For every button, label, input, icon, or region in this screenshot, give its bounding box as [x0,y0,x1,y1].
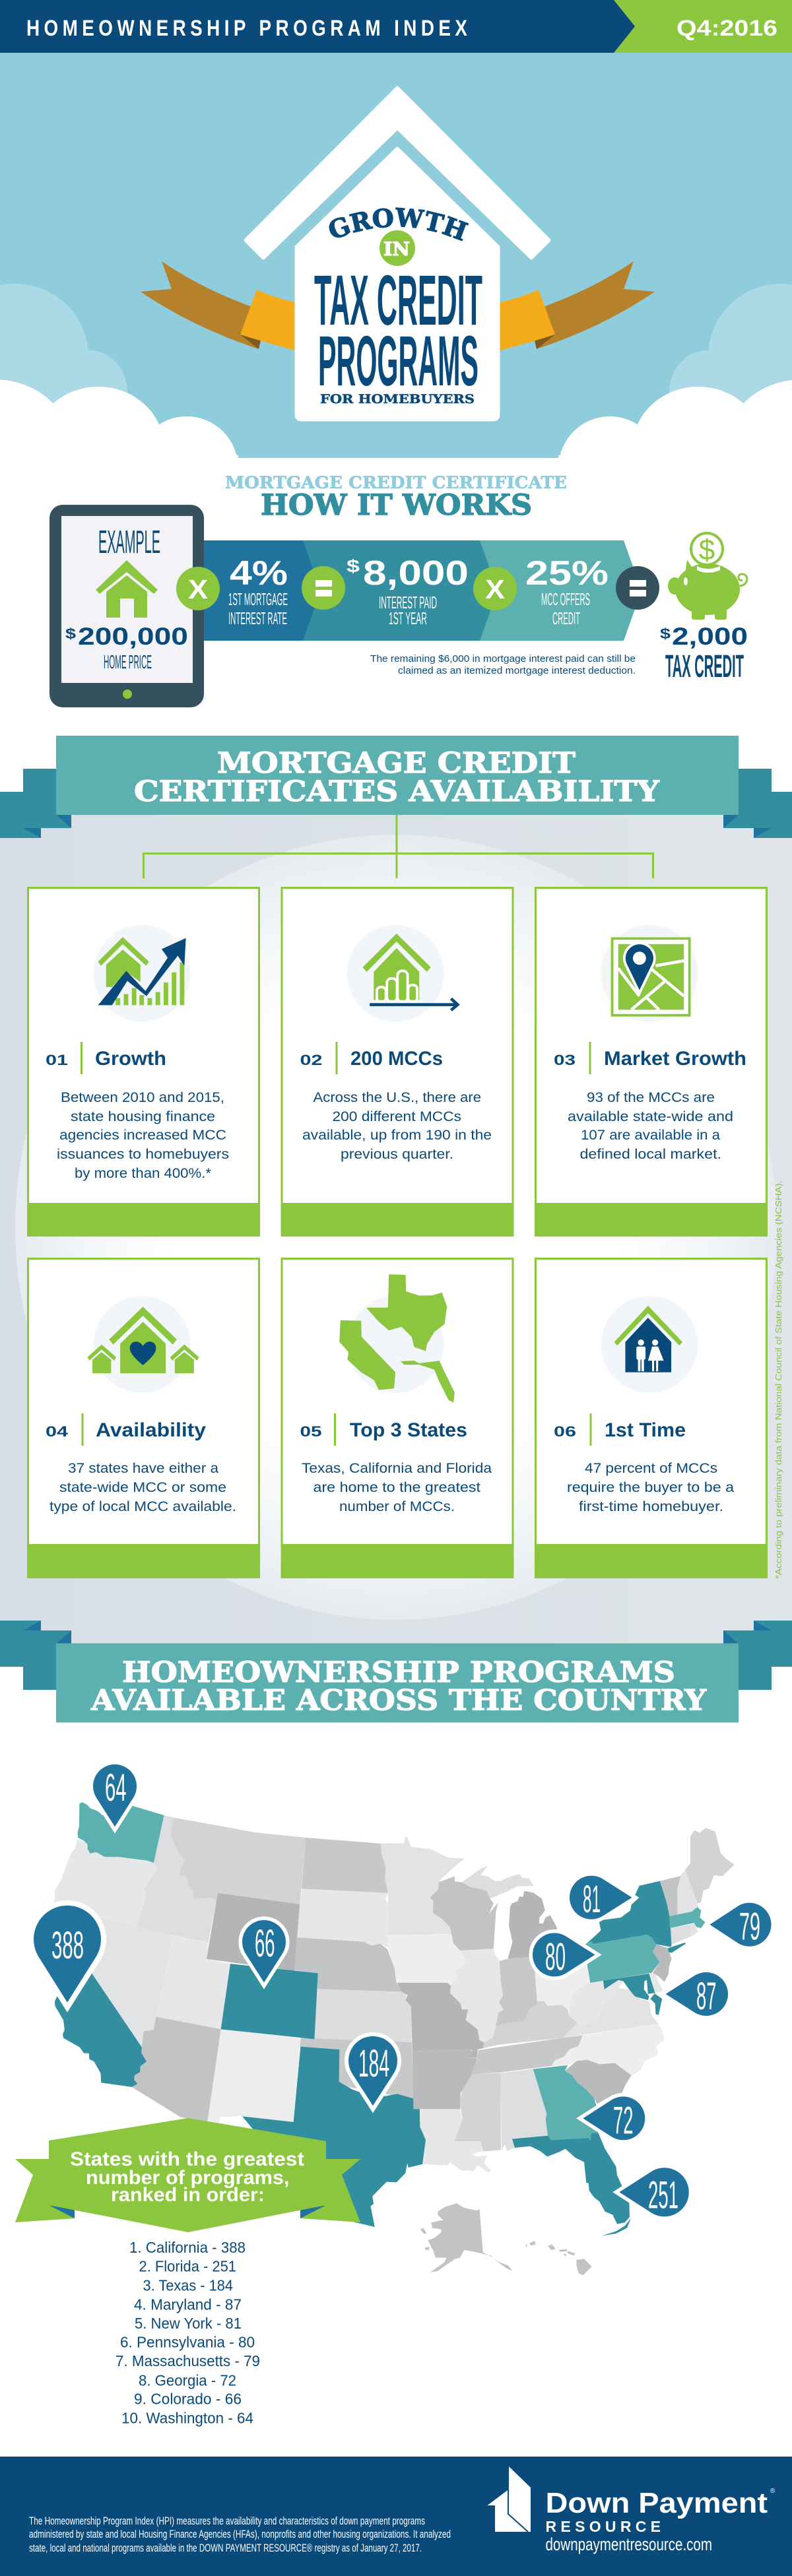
label: 25 percent: CREDIT [552,608,580,628]
card heading: Growth [95,1048,166,1070]
ranked state list: 1. California - 388 [129,2239,246,2256]
state: Hawaii [526,2241,592,2275]
icon: piggy bank: $ [699,534,715,566]
icon: house with bars and arrow [347,925,457,1022]
card 3: market growth [535,888,768,1236]
note text: claimed as an itemized mortgage interest deduction. [398,665,636,676]
label: 8000 [346,554,469,628]
logo wordmark: ® [770,2488,776,2495]
state: Alaska [420,2203,513,2272]
card number: 01 [46,1052,68,1068]
card text [568,1090,733,1162]
card text: state-wide MCC or some [59,1480,226,1495]
card text: require the buyer to be a [567,1480,734,1495]
ribbon text: States with the greatest [70,2148,304,2170]
tablet with example: HOME PRICE [104,652,152,673]
card text: Between 2010 and 2015, [61,1090,224,1105]
map pin: Texas 184: 184 [358,2042,389,2085]
logo wordmark [545,2487,776,2554]
label: 8000: INTEREST PAID [379,593,437,612]
card text: state housing finance [71,1109,215,1124]
equation band: 1ST MORTGAGE [228,589,288,609]
map pin: Florida 251: 251 [648,2174,678,2217]
card divider [589,1042,591,1074]
footer text: administered by state and local Housing Finance Agencies (HFAs), nonprofits and other housing organizations. It analyzed [29,2528,451,2540]
card text: by more than 400%.* [75,1166,211,1181]
availability section background [0,792,792,1650]
map south states [420,2060,632,2173]
banner: programs heading: AVAILABLE ACROSS THE COUNTRY [90,1684,707,1717]
card text [567,1461,734,1514]
clouds: front right [558,379,792,521]
map pin: Maryland 87: 87 [696,1975,717,2018]
green ranking ribbon [15,2118,360,2232]
card text: 47 percent of MCCs [585,1461,717,1476]
title: in badge: IN [383,238,410,260]
how it works heading: HOW IT WORKS [261,489,532,522]
banner: availability heading: CERTIFICATES AVAILABILITY [134,775,660,808]
card divider [82,1413,83,1446]
ranked state list [116,2239,260,2427]
map pin: Pennsylvania 80 [533,1933,595,1978]
tablet price: 200,000 [78,623,188,650]
icon: house with couple [601,1296,698,1393]
result: tax credit: 2,000 [672,623,748,650]
card heading: 200 MCCs [350,1048,443,1070]
card text: Across the U.S., there are [313,1090,481,1105]
ribbon: right [500,261,655,350]
label: 8000: $ [346,556,360,576]
icon: growth house with arrow [94,925,191,1022]
logo wordmark: RESOURCE [545,2518,661,2535]
label: 4 percent [228,554,288,628]
map pin: Massachusetts 79: 79 [739,1906,760,1948]
card text [302,1461,492,1514]
banner: availability heading: MORTGAGE CREDIT [217,747,576,780]
card 1: growth [27,888,260,1236]
state: Texas [242,2047,426,2227]
clouds: front left [0,379,238,521]
card heading: 1st Time [605,1419,686,1441]
card divider [335,1042,338,1074]
footer text [29,2515,451,2554]
note text [370,653,636,676]
card text [50,1461,236,1514]
state: Georgia [533,2065,599,2141]
tablet with example: EXAMPLE [98,525,160,560]
house title card [296,148,498,420]
icon: piggy bank [668,533,747,620]
hero panel: sky with clouds and house title [0,53,792,458]
card divider [590,1413,591,1446]
ranked state list: 2. Florida - 251 [139,2258,236,2275]
map pin: Pennsylvania 80: 80 [545,1936,566,1978]
ranked state list: 9. Colorado - 66 [134,2390,242,2407]
result: tax credit: $ [660,626,671,642]
ranked state list: 4. Maryland - 87 [134,2296,242,2313]
state: New York [585,1881,686,1953]
title: in badge [380,230,415,266]
hero panel: sky with clouds and house title: PROGRAMS [318,321,478,401]
card text [302,1090,492,1162]
card number: 03 [554,1052,576,1068]
tablet with example [50,505,204,707]
connector lines [144,815,653,878]
how it works heading [225,473,567,522]
roof shape [246,88,549,258]
logo wordmark: downpaymentresource.com [545,2534,712,2554]
state: Colorado [221,1964,318,2039]
banner: availability heading [0,736,792,838]
map west states [54,1815,414,2125]
ribbon text: ranked in order: [111,2184,265,2206]
state: Maryland [603,1974,662,2015]
footnote vertical: *According to preliminary data from National Council of State Housing Agencies (NCSHA). [774,1180,783,1579]
map pin: Colorado 66 [242,1920,286,1982]
banner: programs heading [0,1621,792,1722]
state: California [48,1902,147,2087]
card heading: Availability [96,1419,206,1441]
state: Florida [512,2133,631,2236]
how it works heading: MORTGAGE CREDIT CERTIFICATE [225,473,567,492]
card text: type of local MCC available. [50,1499,236,1514]
card text: are home to the greatest [313,1480,480,1495]
card text: available, up from 190 in the [302,1128,492,1143]
icon: houses with heart [87,1296,199,1393]
ribbon text: number of programs, [86,2167,290,2189]
footer text: The Homeownership Program Index (HPI) measures the availability and characteristics of down payment programs [29,2515,425,2527]
map pin: Colorado 66: 66 [255,1922,275,1965]
card text: 107 are available in a [581,1128,720,1143]
card text: first-time homebuyer. [579,1499,723,1514]
card number: 06 [554,1423,576,1440]
operator: times [176,567,220,610]
clouds: back left [0,284,127,455]
result: tax credit [660,623,748,684]
label: 8000: 1ST YEAR [389,608,427,628]
map of US states [48,1802,735,2275]
logo wordmark: Down Payment [545,2487,768,2519]
operator: times second: X [485,574,505,604]
map pin: Massachusetts 79 [710,1903,772,1948]
note text: The remaining $6,000 in mortgage interest paid can still be [370,653,636,664]
state: Pennsylvania [586,1935,660,1983]
card text: 200 different MCCs [333,1109,461,1124]
card text: 37 states have either a [68,1461,218,1476]
ranked state list: 10. Washington - 64 [121,2410,253,2427]
card text: 93 of the MCCs are [587,1090,715,1105]
card heading: Market Growth [604,1048,746,1070]
operator: times: X [188,574,208,604]
state: Washington [77,1802,164,1863]
map pin: Florida 251 [619,2168,689,2217]
logo icon [487,2466,531,2532]
header quarter: Q4:2016 [676,16,777,41]
ribbon: left [141,261,295,350]
card text: number of MCCs. [339,1499,455,1514]
ranked state list: 5. New York - 81 [135,2315,242,2332]
ranked state list: 6. Pennsylvania - 80 [120,2333,255,2350]
map pin: California 388 [34,1906,101,2003]
card text: available state-wide and [568,1109,733,1124]
icon: texas california florida [339,1274,455,1403]
banner: programs heading: HOMEOWNERSHIP PROGRAMS [122,1656,675,1689]
card number: 04 [46,1423,69,1440]
ranked state list: 7. Massachusetts - 79 [116,2352,260,2369]
card text: agencies increased MCC [59,1128,226,1143]
label: 25 percent [525,554,609,628]
operator: equals dark [616,566,659,610]
ranked state list: 8. Georgia - 72 [139,2371,236,2389]
map central and east states [381,1828,735,2109]
card divider [334,1413,336,1446]
ranked state list: 3. Texas - 184 [143,2276,233,2294]
card 6: first time [535,1259,768,1578]
card 2: 200 MCCs [281,888,513,1236]
card number: 05 [300,1423,322,1440]
card text: issuances to homebuyers [57,1147,229,1162]
tablet price: $ [65,626,76,642]
operator: equals [302,566,345,610]
map pin: Georgia 72 [583,2096,645,2142]
equation band [198,540,642,641]
header title: HOMEOWNERSHIP PROGRAM INDEX [26,15,467,41]
map pin: Washington 64 [93,1764,137,1826]
card text: Texas, California and Florida [302,1461,492,1476]
label: 25 percent: 25% [525,554,609,593]
footer text: state, local and national programs available in the DOWN PAYMENT RESOURCE® registry as of January 27, 2017. [29,2542,422,2554]
title: for homebuyers: FOR HOMEBUYERS [320,392,475,406]
icon: map with pin [601,925,698,1022]
equation band: INTEREST RATE [228,608,287,628]
operator: times second [473,567,517,610]
card divider [81,1042,82,1074]
card heading: Top 3 States [350,1419,467,1441]
card number: 02 [300,1052,322,1068]
title: growth arc: GROWTH [329,207,469,242]
hero panel: sky with clouds and house title: TAX CREDIT [314,260,482,340]
map pin: Texas 184 [348,2036,397,2106]
card text: previous quarter. [341,1147,453,1162]
map pin: New York 81 [570,1876,632,1921]
label: 25 percent: MCC OFFERS [541,589,590,609]
card 5: top 3 states [281,1259,513,1578]
map pin: New York 81: 81 [583,1878,601,1921]
card text: defined local market. [579,1147,721,1162]
card text [57,1090,229,1181]
map pin: Maryland 87 [665,1972,728,2018]
map pin: Georgia 72: 72 [613,2100,634,2142]
footer [0,2457,792,2576]
label: 8000: 8,000 [363,554,469,593]
label: 4 percent: 4% [230,554,288,593]
clouds: back right [669,284,792,455]
map pin: California 388: 388 [51,1924,84,1967]
map pin: Washington 64: 64 [105,1766,127,1809]
card 4: availability [27,1259,260,1578]
header bar [0,0,792,53]
icon: house [96,560,158,618]
ribbon text [70,2148,304,2206]
state: Massachusetts [669,1907,706,1928]
